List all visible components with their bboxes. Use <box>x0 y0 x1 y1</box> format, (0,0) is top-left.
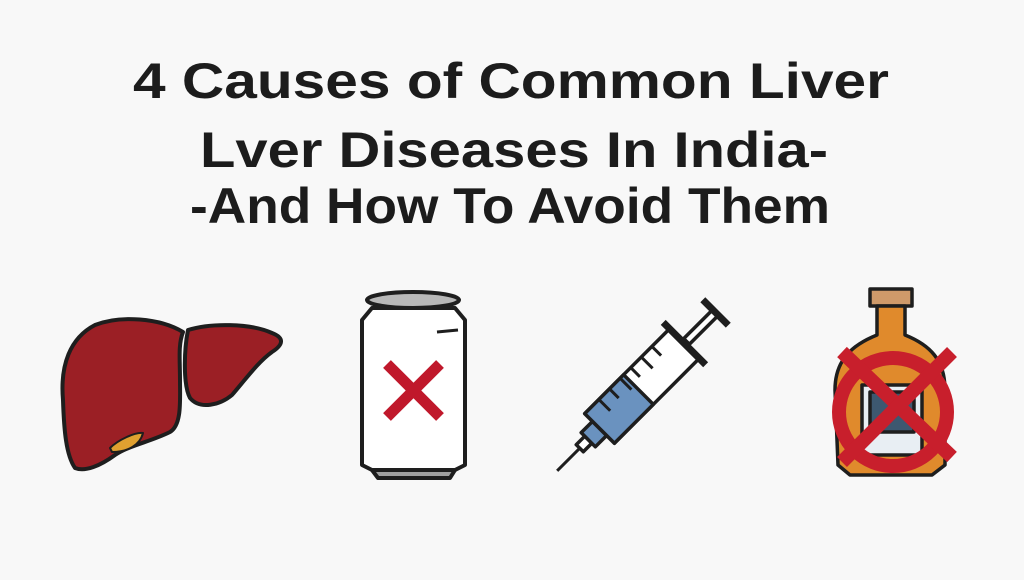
title: 4 Causes of Common Liver <box>133 53 889 109</box>
icon: can with X <box>362 292 465 478</box>
icon: syringe <box>536 291 737 492</box>
icon: liver <box>62 319 281 469</box>
title: -And How To Avoid Them <box>190 178 830 234</box>
title: Lver Diseases In India- <box>200 122 828 178</box>
icon: bottle crossed out <box>835 289 952 475</box>
title <box>133 53 889 234</box>
